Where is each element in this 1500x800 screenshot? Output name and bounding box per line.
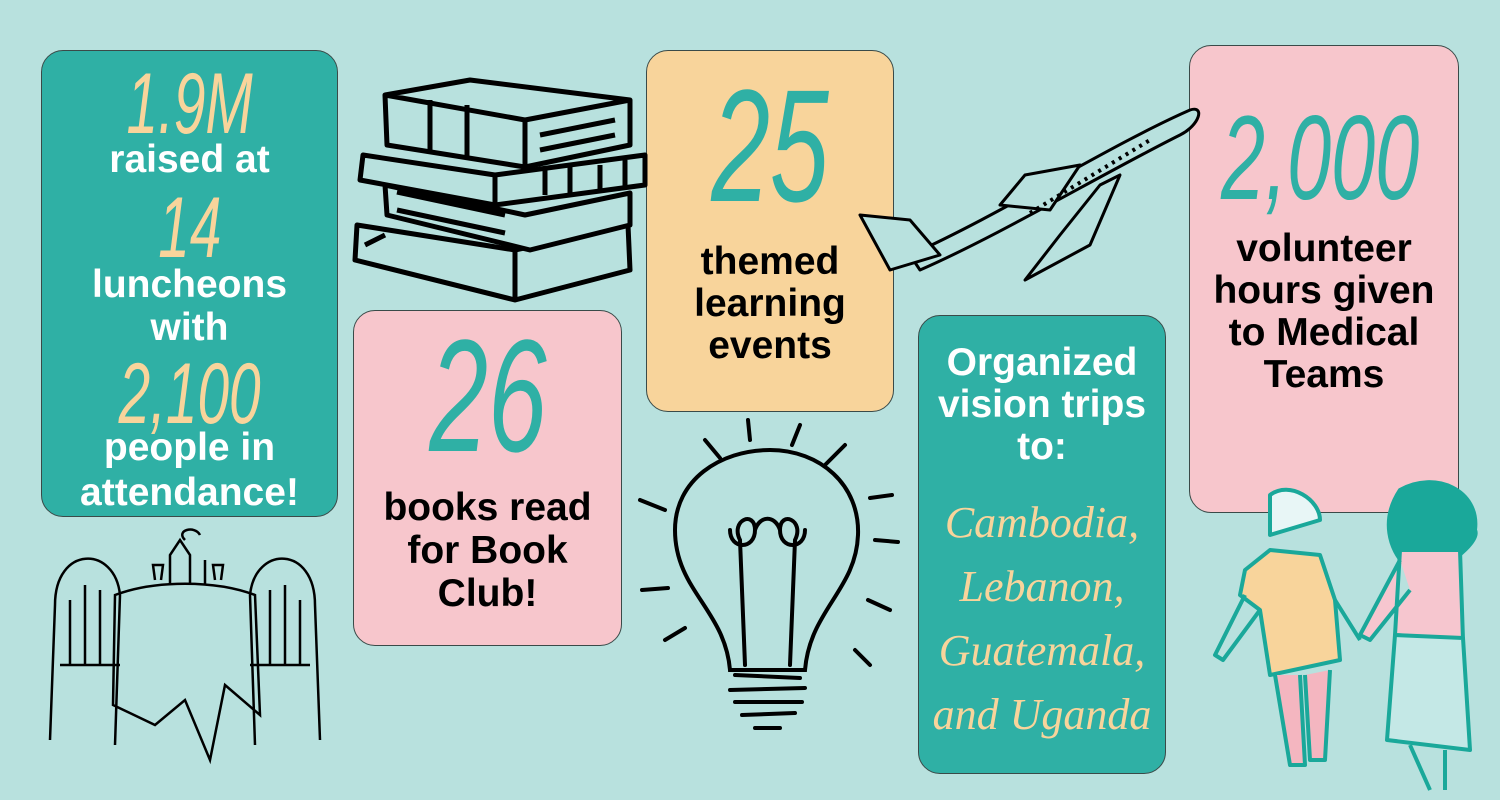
text: countries: Cambodia, bbox=[945, 498, 1139, 547]
number: 2,000: 2,000 bbox=[1221, 91, 1419, 225]
number: 2,100: 2,100 bbox=[118, 346, 261, 442]
number: 25: 25 bbox=[711, 56, 829, 235]
text: volunteer hours: volunteer bbox=[1236, 227, 1412, 270]
text: books read for Book Club: books read bbox=[383, 486, 592, 529]
text: books read for Book Club bbox=[383, 486, 592, 615]
text: people in attendance: attendance! bbox=[80, 471, 299, 514]
icon: dining table bbox=[48, 528, 322, 764]
text: themed learning events bbox=[694, 240, 846, 367]
text: luncheons with: luncheons bbox=[92, 263, 287, 306]
text: volunteer hours: Teams bbox=[1264, 353, 1384, 396]
text: themed learning events: learning bbox=[694, 282, 846, 325]
text: countries: Guatemala, bbox=[939, 626, 1145, 675]
text: organized vision trips to: Organized bbox=[947, 341, 1137, 384]
text: countries bbox=[933, 498, 1151, 739]
text: themed learning events: events bbox=[708, 324, 832, 367]
panel: volunteer hours bbox=[1189, 45, 1459, 513]
number: 1.9M: 1.9M bbox=[126, 56, 253, 152]
text: books read for Book Club: for Book bbox=[407, 529, 568, 572]
text: people in attendance: people in bbox=[104, 426, 275, 469]
text: organized vision trips to: to: bbox=[1017, 425, 1067, 468]
icon: light bulb bbox=[638, 418, 900, 730]
panel: luncheons bbox=[41, 50, 338, 517]
number: 26: 26 bbox=[429, 306, 546, 485]
text: books read for Book Club: Club! bbox=[438, 572, 537, 615]
illustration: two girls holding hands bbox=[1212, 480, 1478, 791]
number: 14: 14 bbox=[158, 180, 221, 276]
text: organized vision trips to bbox=[938, 341, 1146, 468]
text: themed learning events: themed bbox=[701, 240, 839, 283]
text: volunteer hours: hours given bbox=[1213, 269, 1435, 312]
text: raised at: raised at bbox=[109, 138, 270, 181]
panel: book club bbox=[353, 310, 622, 646]
text: volunteer hours bbox=[1213, 227, 1435, 396]
icon: books stack bbox=[352, 78, 648, 302]
icon: airplane bbox=[858, 108, 1200, 282]
text: people in attendance bbox=[80, 426, 299, 514]
text: countries: Lebanon, bbox=[960, 562, 1124, 611]
text: countries: and Uganda bbox=[933, 690, 1151, 739]
text: organized vision trips to: vision trips bbox=[938, 383, 1146, 426]
text: volunteer hours: to Medical bbox=[1229, 311, 1419, 354]
panel: vision trips bbox=[918, 315, 1166, 774]
text: luncheons with bbox=[92, 263, 287, 349]
text: luncheons with: with bbox=[150, 306, 228, 349]
panel: learning events bbox=[646, 50, 894, 412]
